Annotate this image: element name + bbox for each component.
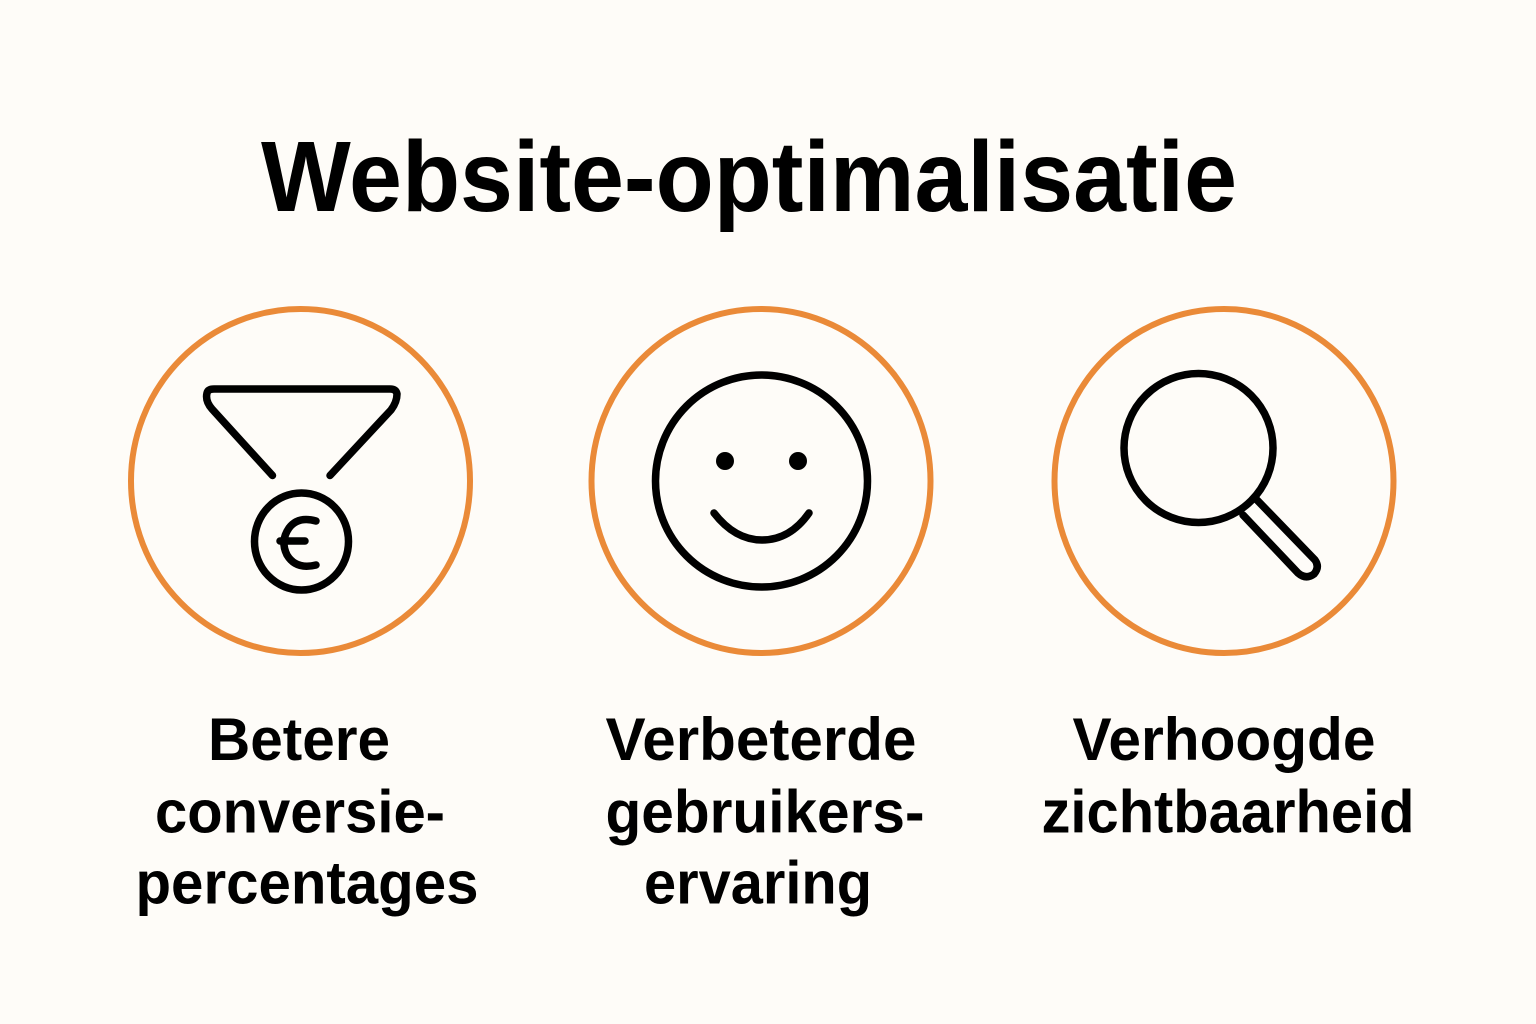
- icon: smiley: [656, 375, 868, 587]
- panel: conversion: [131, 309, 478, 916]
- label: user experience: [606, 706, 924, 916]
- icon: funnel medal with euro: [207, 389, 397, 590]
- label: user experience: Verbeterde: [606, 706, 916, 773]
- panel: visibility: [1042, 309, 1414, 846]
- orange ring: visibility: [1054, 309, 1394, 653]
- label: visibility: [1042, 706, 1414, 846]
- label: conversion: [136, 706, 478, 916]
- label: user experience: ervaring: [644, 850, 872, 916]
- label: conversion: conversie-: [155, 778, 445, 846]
- panel: user experience: [592, 309, 930, 916]
- orange ring: user experience: [592, 309, 930, 653]
- title: Website-optimalisatie: [261, 121, 1237, 233]
- orange ring: conversion: [131, 309, 470, 653]
- label: user experience: gebruikers-: [606, 778, 924, 846]
- label: conversion: Betere: [208, 706, 390, 773]
- label: visibility: zichtbaarheid: [1042, 778, 1414, 846]
- label: visibility: Verhoogde: [1072, 706, 1376, 773]
- icon: magnifying glass: [1124, 374, 1317, 577]
- label: conversion: percentages: [136, 850, 478, 916]
